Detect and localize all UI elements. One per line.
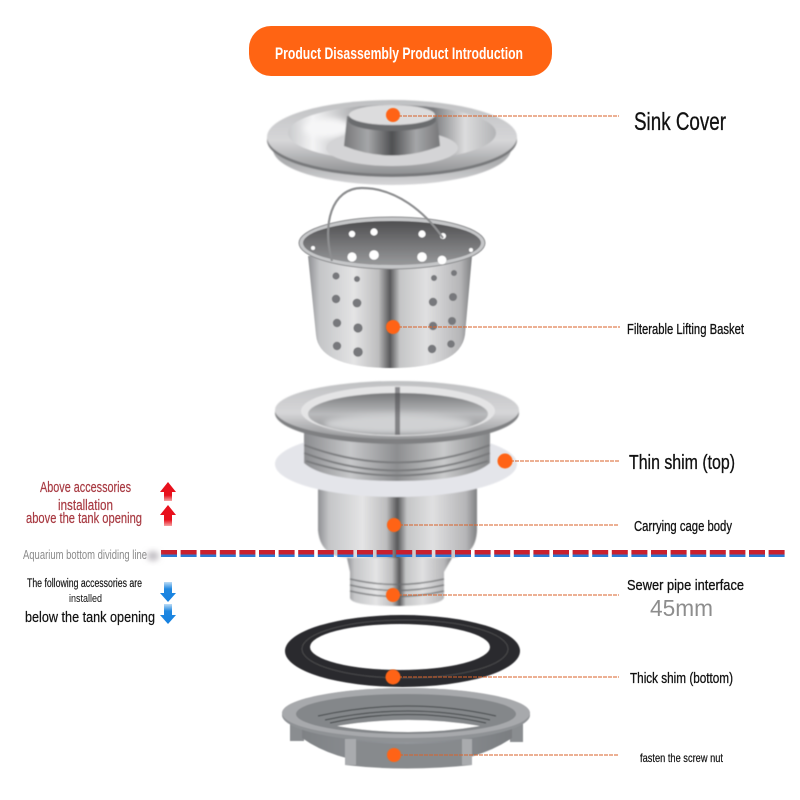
leader line: screw nut	[394, 754, 619, 756]
label: 45mm: 45mm	[650, 595, 713, 621]
label: filterable lifting basket: Filterable Lifting Basket	[627, 321, 745, 338]
leader line: thick shim	[393, 676, 619, 678]
leader line: cage body	[394, 524, 619, 526]
header pill: Product Disassembly Product Introduction	[275, 44, 523, 63]
label: sink cover: Sink Cover	[634, 108, 726, 136]
product photo: strainer body	[275, 381, 519, 606]
header pill	[249, 26, 552, 76]
tank dividing line	[147, 551, 785, 561]
product photo: screw nut	[282, 688, 530, 768]
product photo: lifting basket	[299, 188, 485, 368]
note: above tank opening: above the tank opening	[26, 510, 142, 527]
label: thick shim bottom: Thick shim (bottom)	[630, 670, 733, 687]
note: below tank opening: installed	[69, 593, 102, 605]
marker dots	[386, 108, 512, 762]
note: above tank opening	[26, 479, 142, 527]
label: thin shim top: Thin shim (top)	[629, 452, 735, 474]
product photo: thick shim gasket	[285, 615, 520, 687]
label: fasten the screw nut: fasten the screw nut	[640, 751, 724, 765]
note: dividing line label: Aquarium bottom dividing line	[23, 547, 147, 562]
note: below tank opening	[25, 578, 155, 626]
product photo: sink cover	[267, 100, 517, 185]
leader line: basket	[393, 326, 620, 328]
note: above tank opening: Above accessories	[40, 479, 131, 496]
leader line: thin shim	[505, 460, 619, 462]
label: carrying cage body: Carrying cage body	[634, 518, 732, 535]
leader line: sink cover	[393, 115, 619, 117]
note: below tank opening: The following accessories are	[27, 578, 142, 590]
leader line: sewer interface	[393, 594, 619, 596]
note: below tank opening: below the tank opening	[25, 609, 155, 626]
icon: red up arrows	[160, 482, 176, 526]
icon: blue down arrows	[160, 582, 176, 624]
note: above tank opening: installation	[58, 497, 113, 514]
label: sewer pipe interface: Sewer pipe interface	[627, 577, 744, 594]
